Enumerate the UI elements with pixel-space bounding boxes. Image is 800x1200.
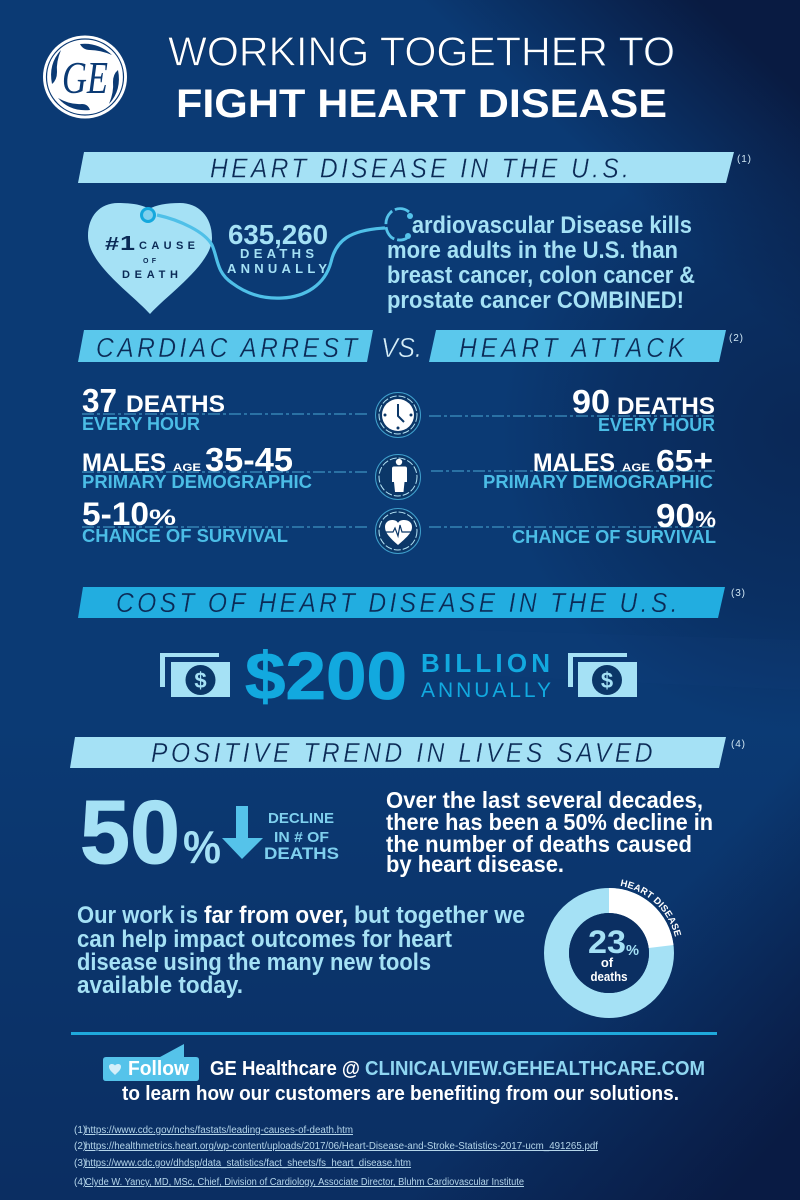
50% decline: %: [183, 821, 221, 873]
text: work far from over: far from over,: [204, 902, 348, 929]
stats: cardiac arrest: 35-45: [205, 441, 293, 478]
footnotes: Clyde W. Yancy, MD, MSc, Chief, Division of Cardiology, Associate Director, Bluhm Cardiovascular Institute: [85, 1177, 524, 1188]
banner: heart disease in the U.S.: (1): [737, 154, 751, 165]
stethoscope line: [142, 208, 413, 298]
stats: cardiac arrest: DEATHS: [126, 391, 225, 418]
follow button: [103, 1044, 199, 1081]
heart with #1 cause of death: CAUSE: [139, 240, 195, 252]
635,260 deaths annually: [227, 219, 328, 276]
stats: heart attack: CHANCE OF SURVIVAL: [512, 527, 716, 547]
stats: heart attack: AGE: [622, 462, 650, 474]
icon: clock: [376, 392, 420, 438]
text: cardiovascular disease: Cardiovascular Disease kills: [396, 212, 692, 239]
stats: cardiac arrest: PRIMARY DEMOGRAPHIC: [82, 472, 312, 492]
stats: heart attack: 90: [656, 497, 695, 534]
635,260 deaths annually: ANNUALLY: [227, 261, 327, 276]
text: fifty percent decline: the number of deaths caused: [386, 831, 692, 857]
call to action: to learn how our customers are benefiting from our solutions.: [122, 1083, 679, 1105]
stats: cardiac arrest: EVERY HOUR: [82, 414, 200, 434]
footnotes: https://healthmetrics.heart.org/wp-content/uploads/2017/06/Heart-Disease-and-Stroke-Statistics-2017-ucm_491265.pdf: [85, 1141, 598, 1152]
text: work far from over: disease using the many new tools: [77, 949, 431, 976]
stats: cardiac arrest: MALES: [82, 449, 166, 477]
banner: heart attack: [429, 330, 743, 363]
footnotes: https://www.cdc.gov/dhdsp/data_statistics/fact_sheets/fs_heart_disease.htm: [85, 1158, 411, 1169]
footnotes: (2): [74, 1141, 86, 1152]
icon: money right: $: [601, 668, 613, 693]
stats: cardiac arrest: 5-10: [82, 496, 149, 532]
text: fifty percent decline: [386, 787, 713, 877]
donut chart: 23: [588, 924, 626, 960]
text: cardiovascular disease: more adults in the U.S. than: [387, 237, 678, 264]
stats: cardiac arrest: [82, 382, 312, 546]
$200 figure: $200: [245, 639, 407, 714]
icon: person: [376, 454, 420, 500]
text: work far from over: can help impact outcomes for heart: [77, 926, 452, 953]
donut chart: HEART DISEASE: [620, 880, 682, 937]
decline label: [264, 810, 339, 863]
divider: [71, 1032, 717, 1035]
donut chart: deaths: [590, 969, 628, 984]
text: cardiovascular disease: breast cancer, colon cancer &: [387, 262, 695, 289]
banner: cost of heart disease: (3): [731, 588, 745, 599]
logo: GE monogram: [43, 36, 127, 118]
text: cardiovascular disease: [387, 212, 695, 314]
heart with #1 cause of death: [88, 203, 212, 314]
heart with #1 cause of death: OF: [143, 258, 157, 265]
donut chart: of: [601, 955, 614, 970]
footnotes: (3): [74, 1158, 86, 1169]
footnotes: https://www.cdc.gov/nchs/fastats/leading-causes-of-death.htm: [85, 1125, 353, 1136]
icon: money right: [568, 653, 637, 697]
635,260 deaths annually: 635,260: [228, 219, 328, 250]
billion annually: [421, 648, 551, 702]
stats: cardiac arrest: %: [149, 505, 176, 530]
donut chart: [544, 880, 682, 1018]
banner: positive trend: POSITIVE TREND IN LIVES SAVED: [151, 737, 653, 768]
stats: cardiac arrest: CHANCE OF SURVIVAL: [82, 526, 288, 546]
stats: heart attack: PRIMARY DEMOGRAPHIC: [483, 472, 713, 492]
banner: heart disease in the U.S.: [78, 152, 751, 184]
decline label: IN # OF: [274, 829, 329, 846]
call to action: GE Healthcare @: [210, 1058, 360, 1080]
text: work far from over: available today.: [77, 972, 243, 999]
heart with #1 cause of death: DEATH: [122, 269, 178, 281]
call to action: [122, 1058, 705, 1105]
donut chart: %: [626, 942, 639, 959]
text: fifty percent decline: Over the last several decades,: [386, 787, 703, 813]
text: cardiovascular disease: prostate cancer COMBINED!: [387, 287, 684, 314]
stats: heart attack: DEATHS: [617, 393, 715, 420]
banner: heart attack: HEART ATTACK: [459, 332, 686, 363]
title: [168, 28, 675, 126]
banner: positive trend: (4): [731, 739, 745, 750]
heart with #1 cause of death: #: [105, 234, 119, 254]
stats: cardiac arrest: AGE: [173, 462, 201, 474]
text: fifty percent decline: by heart disease.: [386, 851, 564, 877]
635,260 deaths annually: DEATHS: [240, 246, 314, 261]
text: fifty percent decline: there has been a 50% decline in: [386, 809, 713, 835]
stats: heart attack: [483, 383, 716, 547]
text: work far from over: [77, 902, 525, 999]
banner: heart attack: (2): [729, 333, 743, 344]
billion annually: ANNUALLY: [421, 679, 551, 702]
footnotes: [74, 1125, 598, 1188]
stats: heart attack: 90: [572, 383, 610, 420]
call to action: CLINICALVIEW.GEHEALTHCARE.COM: [365, 1058, 705, 1080]
footnotes: (4): [74, 1177, 86, 1188]
heart with #1 cause of death: 1: [120, 233, 135, 255]
icon: heart with pulse: [376, 508, 420, 554]
banner: cost of heart disease: COST OF HEART DISEASE IN THE U.S.: [116, 587, 677, 618]
billion annually: BILLION: [421, 648, 550, 678]
follow button: Follow: [128, 1058, 189, 1080]
decline label: DECLINE: [268, 810, 334, 827]
arrow down: [222, 806, 263, 859]
logo: GE monogram: GE: [62, 52, 108, 103]
dashed connector lines: [82, 414, 715, 527]
stats: heart attack: %: [695, 507, 716, 532]
footnotes: (1): [74, 1125, 86, 1136]
decline label: DEATHS: [264, 844, 339, 863]
icon: money left: [160, 653, 230, 697]
vs: VS.: [381, 332, 422, 363]
banner: cardiac arrest: CARDIAC ARREST: [96, 332, 359, 363]
text: work far from over: but together we: [354, 902, 525, 929]
icon: money left: $: [194, 668, 207, 693]
title: FIGHT HEART DISEASE: [176, 82, 667, 126]
50% decline: 50: [80, 783, 180, 883]
title: WORKING TOGETHER TO: [168, 28, 675, 74]
stats: cardiac arrest: 37: [82, 382, 117, 419]
banner: heart disease in the U.S.: HEART DISEASE IN THE U.S.: [210, 152, 629, 184]
stats: heart attack: EVERY HOUR: [598, 415, 715, 435]
stats: heart attack: MALES: [533, 449, 615, 477]
stats: heart attack: 65+: [656, 443, 713, 478]
text: work far from over: Our work is: [77, 902, 198, 929]
